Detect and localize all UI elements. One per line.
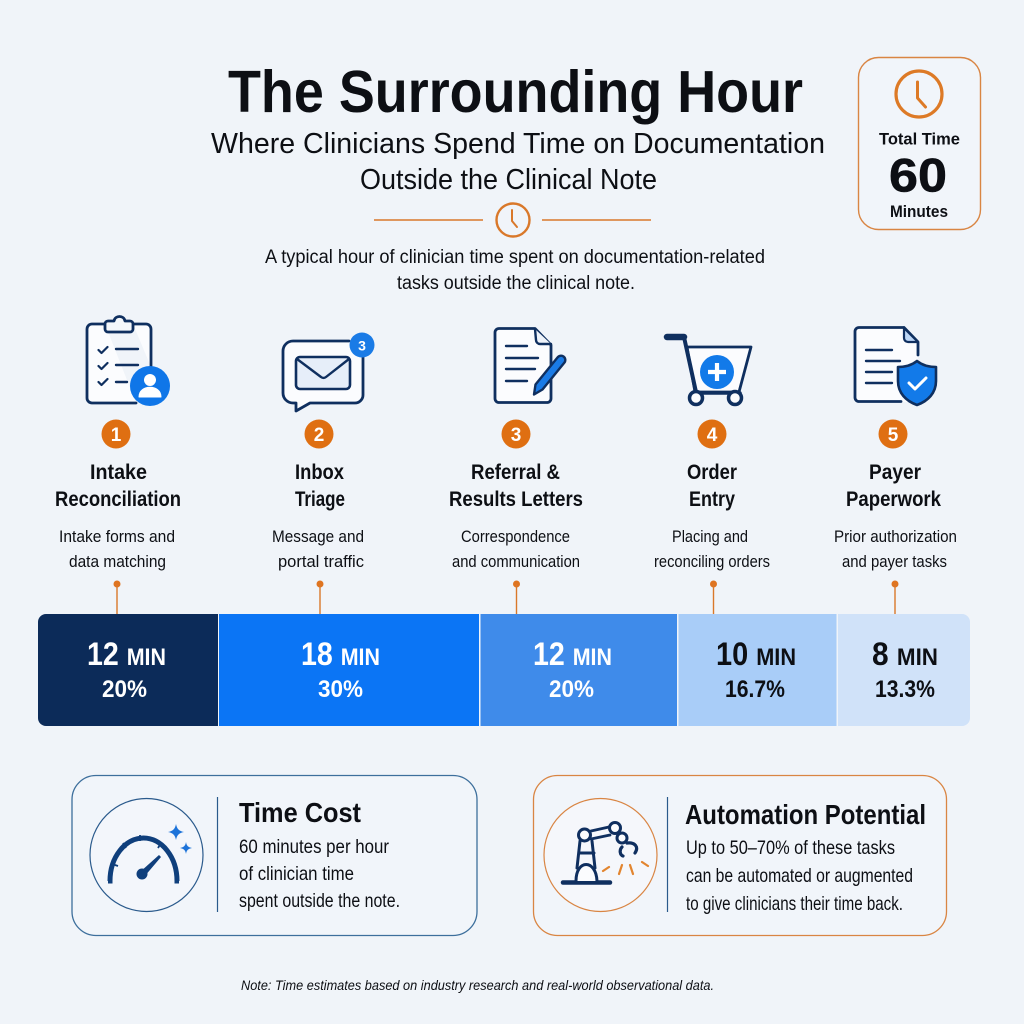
panel heading: Time Cost (239, 797, 361, 828)
step description (654, 527, 770, 571)
step number 1: 1 (111, 425, 122, 446)
connector (114, 580, 120, 614)
segment: referral 12 min (480, 614, 677, 726)
step description (272, 527, 364, 571)
panel body: 60 minutes per hour (239, 836, 389, 858)
icon: shopping cart with plus (667, 337, 751, 404)
connector (892, 580, 898, 614)
total time box (858, 58, 980, 230)
panel divider (216, 797, 218, 912)
total time label: Total Time (879, 130, 960, 148)
step 2: inbox triage (272, 332, 374, 614)
total time value: 60 (889, 148, 947, 202)
segment: inbox 18 min: 30% (318, 676, 363, 703)
step title: Results Letters (449, 488, 583, 511)
stacked time bar (38, 614, 970, 726)
icon: document with pen (495, 328, 565, 402)
segment: intake 12 min: 20% (102, 676, 147, 703)
panel heading: Automation Potential (685, 799, 926, 830)
subtitle: Outside the Clinical Note (360, 164, 657, 196)
step 5: payer paperwork (834, 327, 957, 614)
intro text (265, 247, 765, 294)
step title (846, 461, 941, 511)
icon: document with shield (855, 327, 936, 405)
panel body: to give clinicians their time back. (686, 893, 903, 915)
segment: order entry 10 min: 16.7% (725, 676, 785, 703)
panel body (239, 836, 400, 912)
step description: Message and (272, 527, 364, 546)
step number 5: 5 (888, 425, 899, 446)
step title: Paperwork (846, 488, 941, 511)
step description (452, 527, 580, 571)
step description: Prior authorization (834, 527, 957, 546)
segment: order entry 10 min: 10 MIN (716, 636, 796, 672)
footnote: Note: Time estimates based on industry research and real-world observational data. (241, 977, 714, 993)
panel body: Up to 50–70% of these tasks (686, 837, 895, 859)
panel divider (666, 797, 668, 912)
step description: Placing and (672, 527, 748, 546)
step description: and payer tasks (842, 552, 947, 571)
step description: Correspondence (461, 527, 570, 546)
segment: payer 8 min (838, 614, 970, 726)
icon: robot arm (544, 798, 657, 912)
step number 2 (304, 420, 334, 448)
intro text: A typical hour of clinician time spent on documentation-related (265, 247, 765, 268)
step 1: intake reconciliation (55, 316, 181, 614)
connector (316, 580, 324, 614)
connector (710, 580, 717, 614)
panel: time cost (72, 776, 477, 936)
step title: Reconciliation (55, 488, 181, 511)
subtitle (211, 128, 825, 196)
title: The Surrounding Hour (228, 59, 803, 125)
intro text: tasks outside the clinical note. (397, 273, 635, 294)
panel body: of clinician time (239, 863, 354, 885)
panel body: can be automated or augmented (686, 865, 913, 887)
step description: data matching (69, 552, 166, 571)
panel body: spent outside the note. (239, 890, 400, 912)
panel body (686, 837, 913, 915)
title divider with clock icon (374, 204, 651, 236)
step title: Order (687, 461, 737, 484)
step title (295, 461, 345, 511)
step title: Intake (90, 461, 147, 484)
step number 3 (502, 420, 530, 448)
segment: payer 8 min: 13.3% (875, 676, 935, 703)
subtitle: Where Clinicians Spend Time on Documentation (211, 128, 825, 160)
icon: message envelope (283, 332, 374, 411)
connector (513, 580, 520, 614)
segment: order entry 10 min (678, 614, 836, 726)
total time unit: Minutes (890, 202, 948, 221)
step title (449, 461, 583, 511)
badge number: 3 (358, 338, 366, 354)
segment: inbox 18 min: 18 MIN (301, 636, 380, 672)
segment: referral 12 min: 20% (549, 676, 594, 703)
step title: Referral & (471, 461, 560, 484)
segment: payer 8 min: 8 MIN (872, 636, 938, 672)
panel: automation potential (534, 776, 946, 936)
step number 2: 2 (314, 425, 324, 446)
segment: intake 12 min (38, 614, 218, 726)
step title: Inbox (295, 461, 344, 484)
step number 5 (878, 420, 908, 448)
step title (687, 461, 737, 511)
segment: referral 12 min: 12 MIN (533, 636, 612, 672)
step description: Intake forms and (59, 527, 175, 546)
step title: Triage (295, 488, 345, 511)
step description (59, 527, 175, 571)
step title (55, 461, 181, 511)
icon: clipboard with person (87, 316, 170, 406)
step 4: order entry (654, 337, 770, 614)
icon: gauge (90, 798, 203, 912)
step number 4: 4 (707, 425, 718, 446)
icon: clock (896, 71, 942, 117)
step description: and communication (452, 552, 580, 571)
segment: intake 12 min: 12 MIN (87, 636, 166, 672)
step description (834, 527, 957, 571)
step description: portal traffic (278, 552, 364, 571)
step number 1 (102, 420, 130, 448)
step 3: referral and results letters (449, 328, 583, 614)
step description: reconciling orders (654, 552, 770, 571)
segment: inbox 18 min (219, 614, 479, 726)
step title: Payer (869, 461, 921, 484)
step title: Entry (689, 488, 735, 511)
step number 4 (698, 420, 726, 448)
step number 3: 3 (511, 425, 521, 446)
